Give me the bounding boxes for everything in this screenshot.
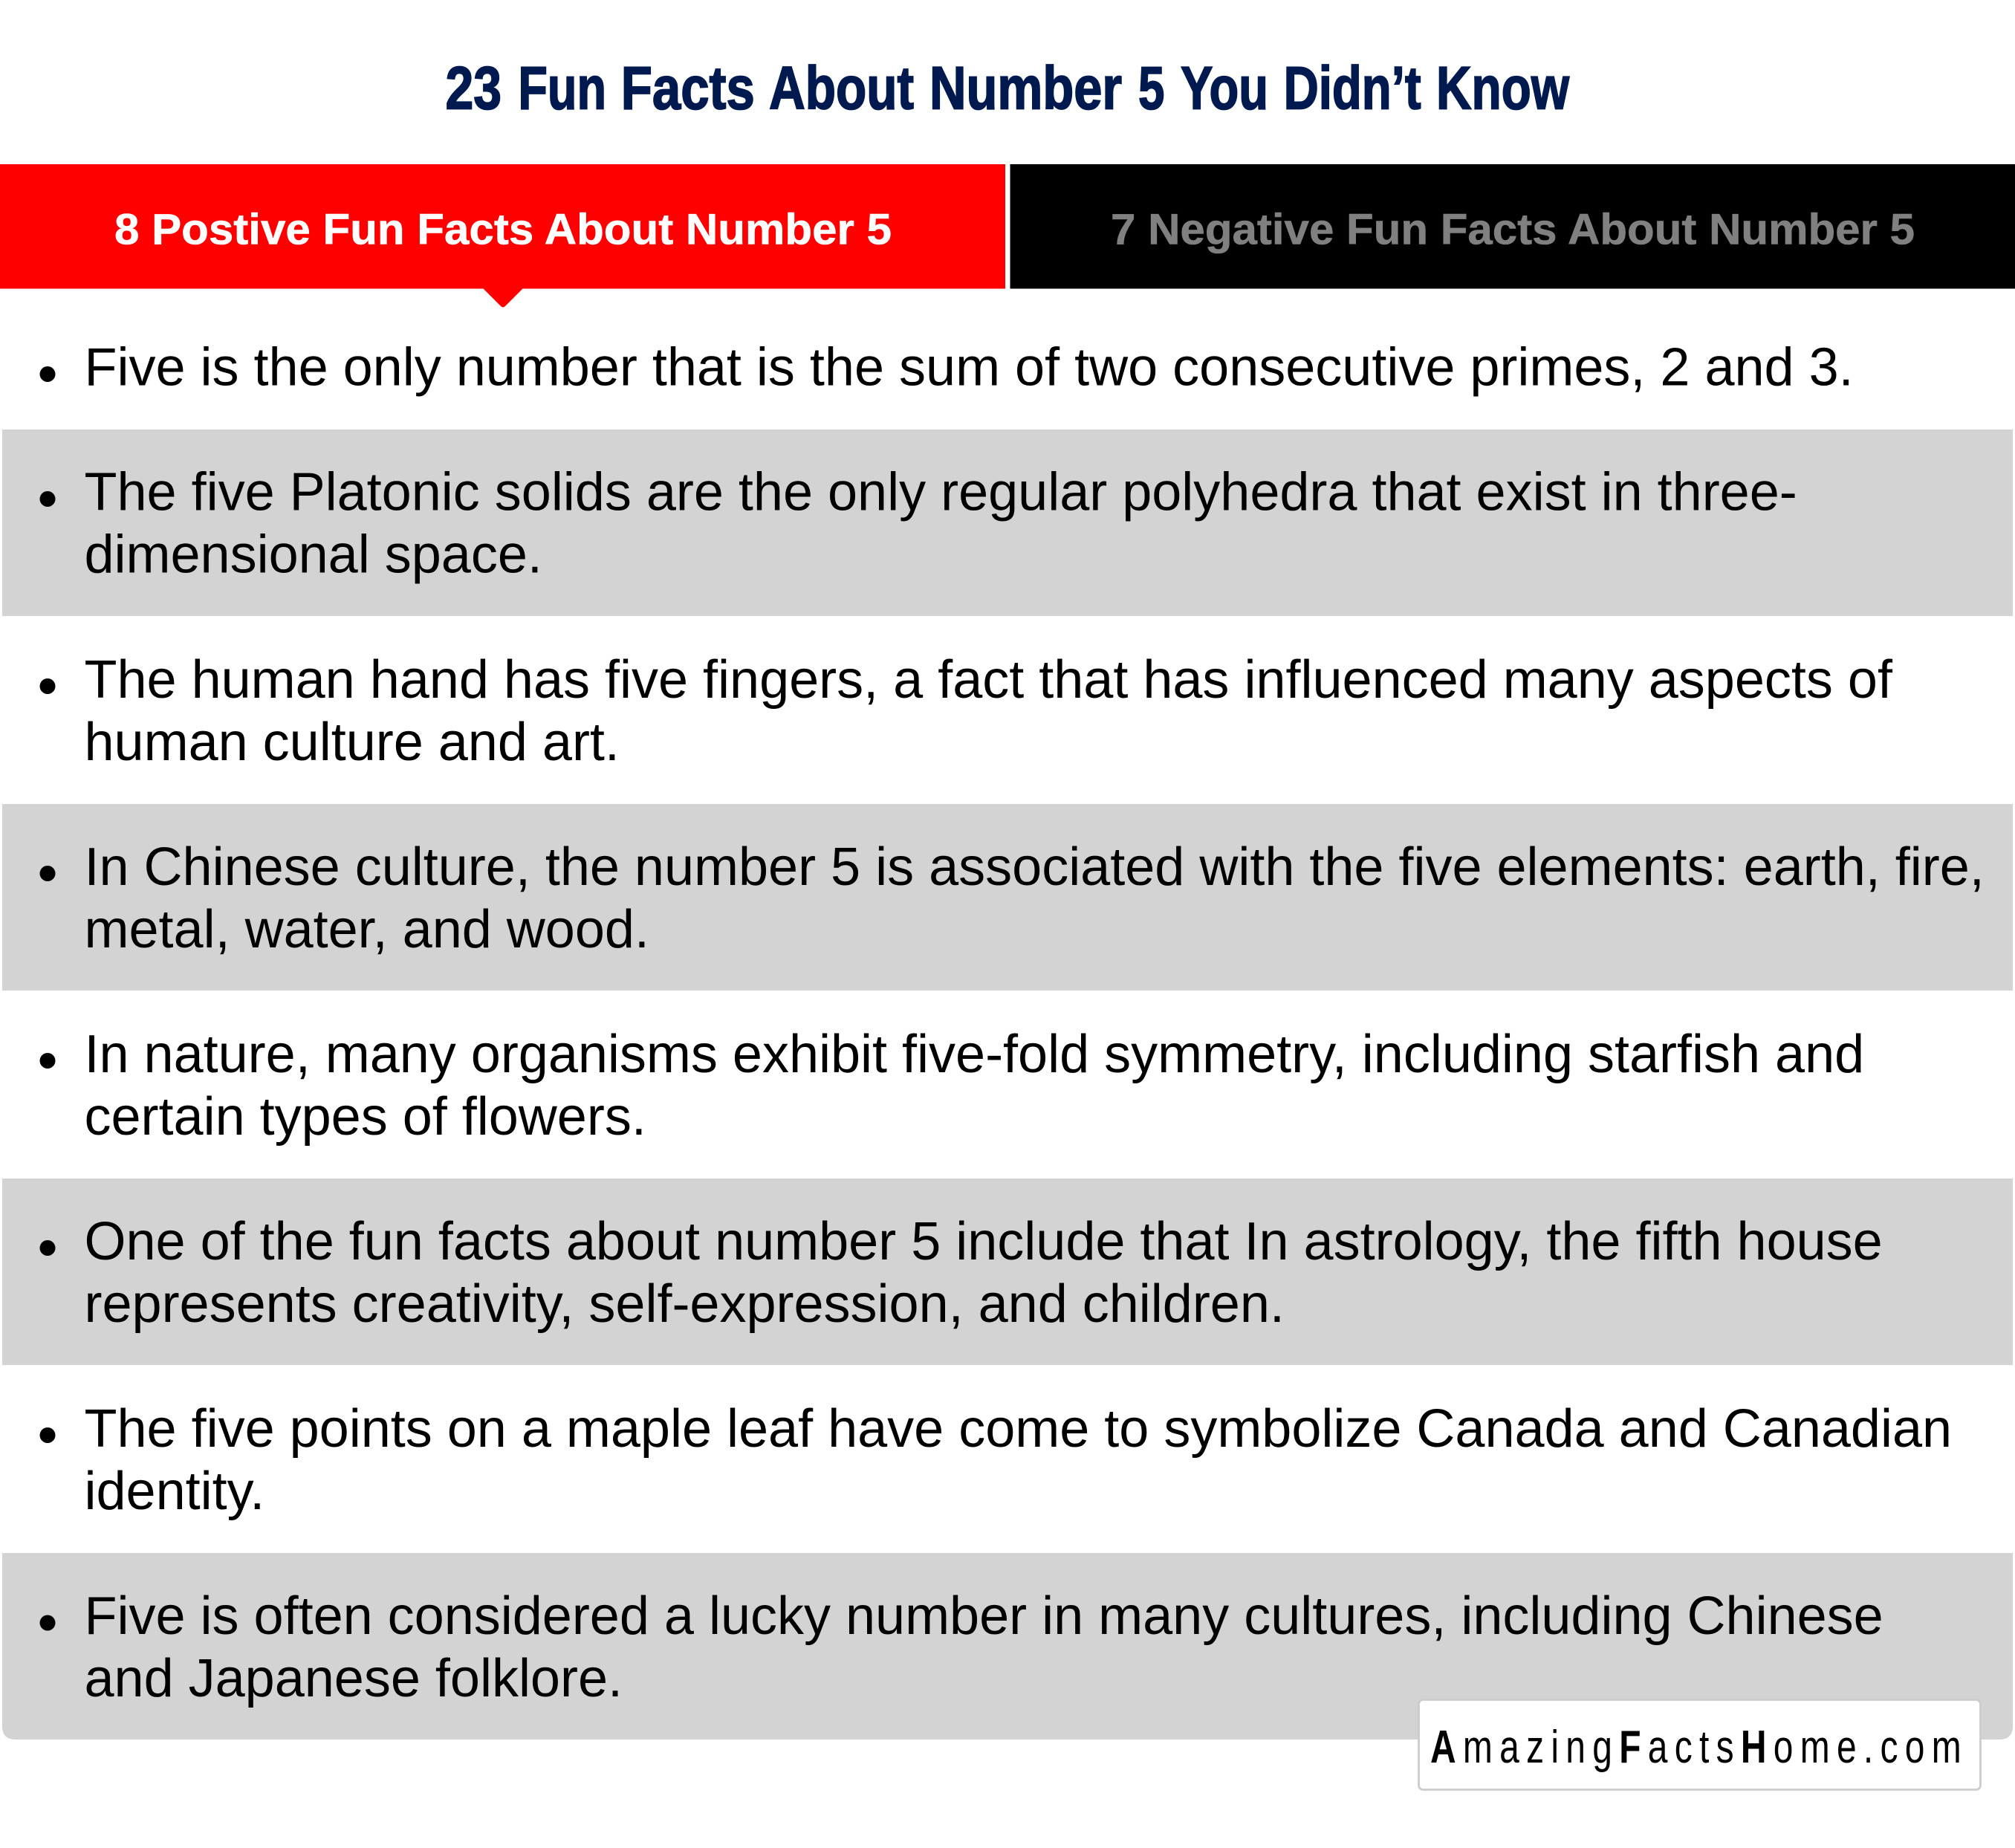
fact 2: dimensional space. <box>85 525 542 585</box>
fact 5: In nature, many organisms exhibit five-fold symmetry, including starfish and <box>85 1025 1864 1084</box>
fact 4: In Chinese culture, the number 5 is associated with the five elements: earth, fire, <box>85 837 1985 897</box>
title: 5 <box>1138 55 1164 122</box>
title: You <box>1181 55 1268 122</box>
fact 7 <box>40 1399 1952 1521</box>
fact 2: The five Platonic solids are the only regular polyhedra that exist in three- <box>85 463 1797 522</box>
title: Number <box>929 55 1122 122</box>
title: 23 <box>446 55 502 122</box>
tab label: positive: 8 Postive Fun Facts About Number 5 <box>114 205 892 254</box>
title: Know <box>1436 55 1569 122</box>
watermark text: AmazingFactsHome.com <box>1430 1722 1968 1773</box>
title: Fun <box>518 55 606 122</box>
fact 3: human culture and art. <box>85 713 620 772</box>
fact 2 <box>2 429 2013 616</box>
fact 6: One of the fun facts about number 5 include that In astrology, the fifth house <box>85 1212 1883 1271</box>
fact 7: The five points on a maple leaf have come to symbolize Canada and Canadian <box>85 1399 1952 1459</box>
fact 3 <box>40 650 1893 772</box>
tab: positive facts <box>0 164 1005 308</box>
watermark badge <box>1419 1700 1981 1789</box>
fact 8: and Japanese folklore. <box>85 1649 623 1708</box>
title <box>446 55 1569 122</box>
tab label: negative: 7 Negative Fun Facts About Number 5 <box>1111 205 1915 254</box>
fact 7: identity. <box>85 1462 265 1521</box>
fact 8 <box>2 1553 2013 1740</box>
fact 4: metal, water, and wood. <box>85 900 649 959</box>
title: About <box>769 55 914 122</box>
fact 5 <box>40 1025 1864 1147</box>
tab: negative facts <box>1010 164 2015 288</box>
tab pointer <box>483 288 523 308</box>
fact 5: certain types of flowers. <box>85 1087 646 1147</box>
fact 6 <box>2 1178 2013 1365</box>
fact 4 <box>2 804 2013 991</box>
fact 6: represents creativity, self-expression, and children. <box>85 1274 1285 1334</box>
title: Facts <box>621 55 755 122</box>
fact 1: Five is the only number that is the sum of two consecutive primes, 2 and 3. <box>85 338 1854 398</box>
title: Didn’t <box>1284 55 1421 122</box>
fact 3: The human hand has five fingers, a fact that has influenced many aspects of <box>85 650 1893 710</box>
fact 8: Five is often considered a lucky number in many cultures, including Chinese <box>85 1586 1883 1646</box>
